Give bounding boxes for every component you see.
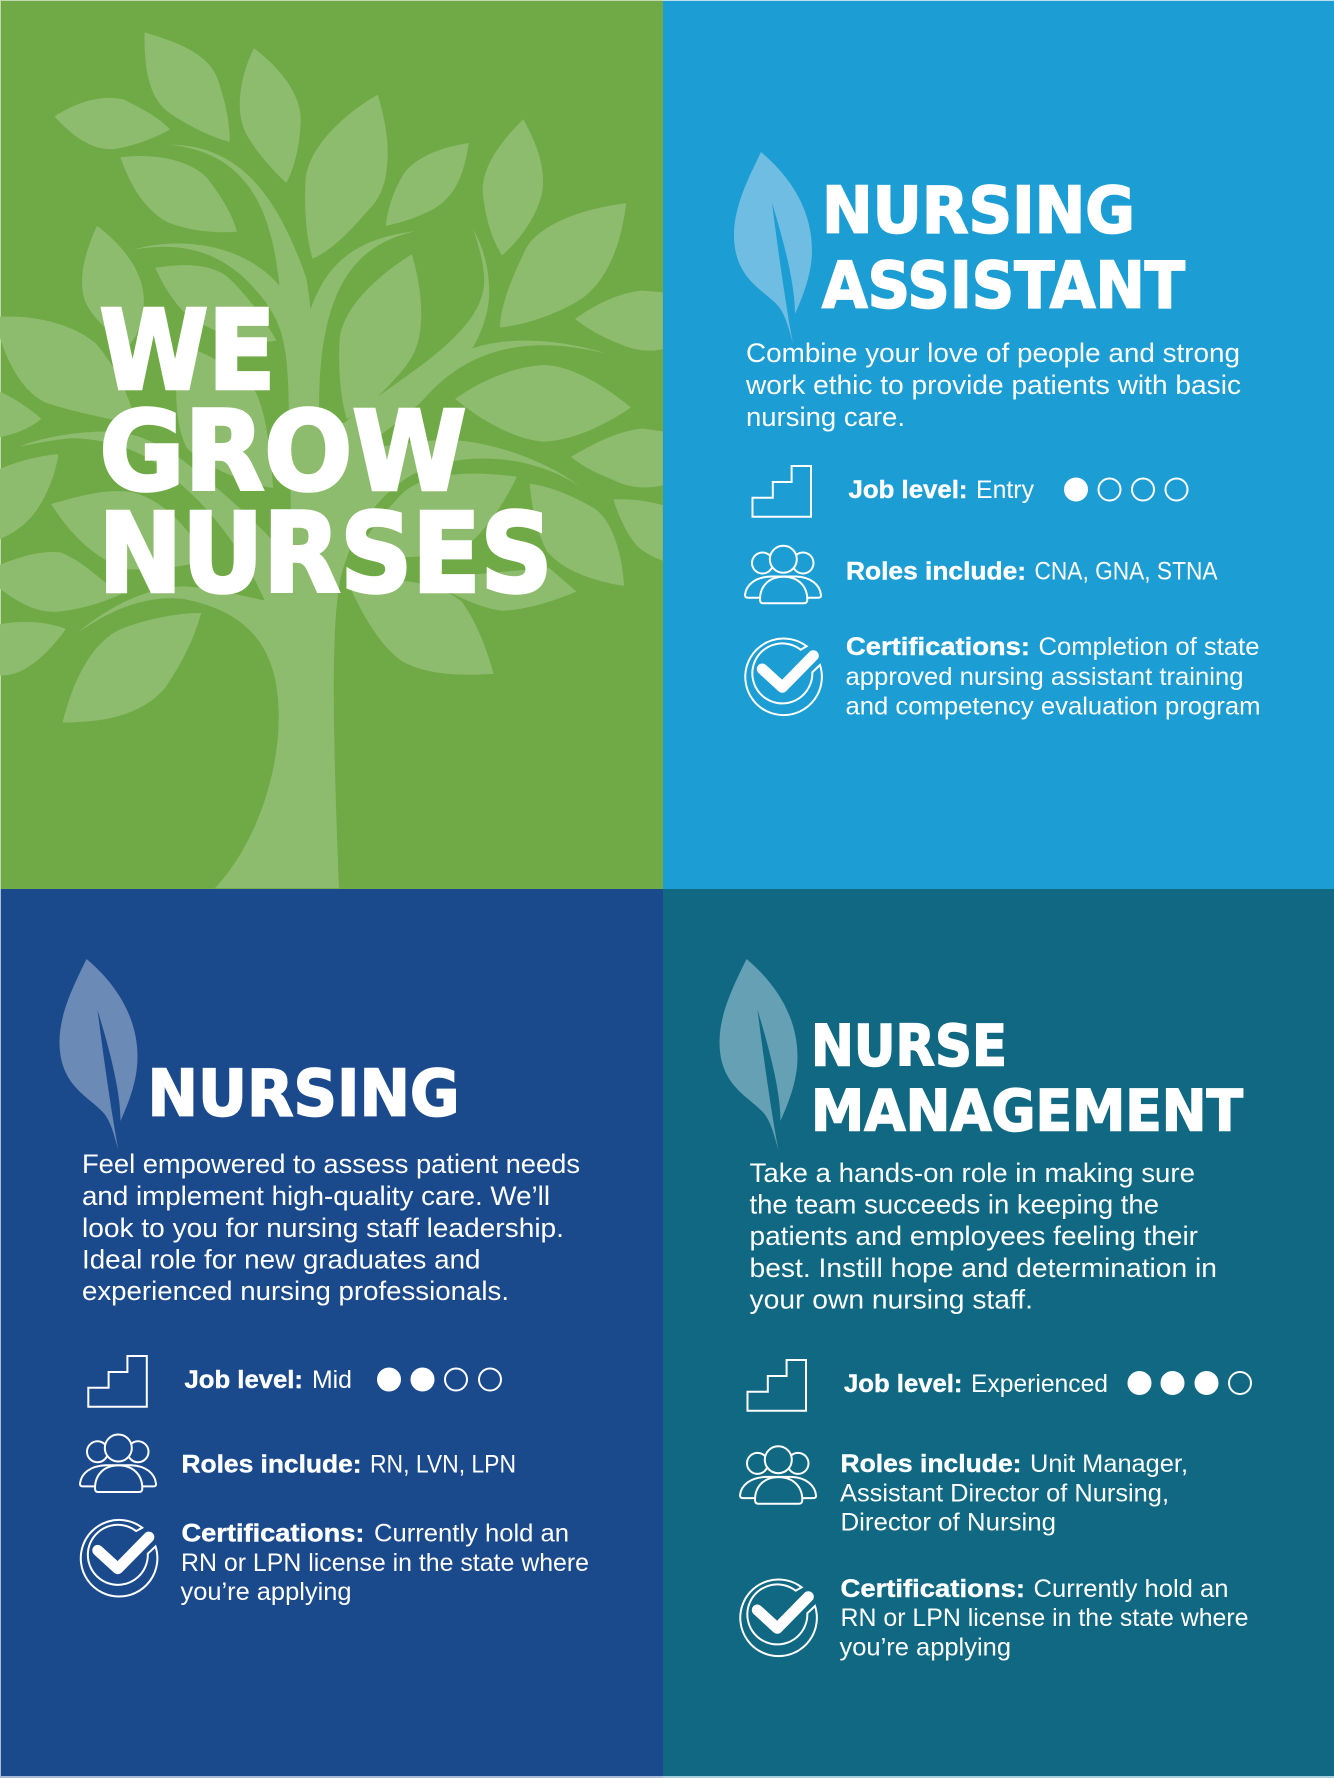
roles: CNA, GNA, STNA [1034,558,1218,586]
job level: Job level: [844,1370,962,1398]
certifications: Certifications: [182,1520,364,1548]
icon: people [740,1446,816,1504]
roles [182,1450,516,1478]
description: your own nursing staff. [750,1284,1033,1314]
icon: certification check [745,639,822,715]
main title [98,286,552,617]
roles [840,1450,1188,1536]
heading: nursing: NURSING [148,1058,460,1132]
job level: Mid [312,1366,352,1394]
job level: Experienced [971,1370,1108,1398]
icon: people [80,1434,156,1492]
icon: people [745,546,821,603]
icon: certification check [81,1520,157,1597]
certifications: you’re applying [840,1634,1011,1662]
main title: NURSES [98,489,552,617]
icon: certification check [740,1580,817,1656]
roles: Roles include: [182,1450,362,1478]
roles [846,558,1218,586]
panel: nursing assistant [663,0,1334,889]
heading: nursing assistant [822,174,1185,324]
description: nursing care. [746,402,905,432]
description: best. Instill hope and determination in [750,1253,1217,1283]
certifications: approved nursing assistant training [846,663,1244,691]
description: work ethic to provide patients with basic [745,370,1241,400]
panel: nursing [0,889,663,1778]
roles: Roles include: [840,1450,1022,1478]
job level: Job level: [848,476,968,504]
heading: nursing assistant: NURSING [822,174,1135,248]
main title: WE [100,286,276,414]
certifications: Completion of state [1038,633,1260,661]
job level: Job level: [184,1366,303,1394]
icon: stairs [88,1356,147,1407]
description: patients and employees feeling their [750,1221,1198,1251]
certifications [180,1520,589,1606]
certifications: Certifications: [840,1575,1025,1603]
heading: nurse management: MANAGEMENT [811,1078,1243,1144]
description [82,1149,580,1306]
job level: Entry [976,476,1034,504]
panel: we grow nurses [0,0,663,889]
icon: leaf [720,959,798,1151]
roles: Director of Nursing [840,1508,1056,1536]
description: Take a hands-on role in making sure [750,1158,1195,1188]
certifications [840,1575,1248,1662]
description: experienced nursing professionals. [82,1276,509,1306]
heading: nursing assistant: ASSISTANT [822,250,1185,324]
description [745,338,1241,432]
certifications: RN or LPN license in the state where [181,1549,589,1577]
heading: nurse management: NURSE [811,1014,1007,1080]
description [750,1158,1217,1314]
certifications: Currently hold an [374,1520,569,1548]
tree illustration [0,32,663,888]
description: Combine your love of people and strong [746,338,1240,368]
job level [844,1370,1108,1398]
description: the team succeeds in keeping the [750,1190,1159,1220]
certifications [846,633,1260,720]
certifications: Currently hold an [1034,1575,1228,1603]
job level dots [1065,478,1188,500]
main title: GROW [100,387,466,515]
certifications: Certifications: [846,633,1030,661]
certifications: RN or LPN license in the state where [840,1604,1248,1632]
certifications: you’re applying [180,1578,352,1606]
roles: Unit Manager, [1030,1450,1188,1478]
description: look to you for nursing staff leadership. [82,1213,564,1243]
icon: leaf [60,959,138,1151]
roles: RN, LVN, LPN [370,1450,516,1478]
description: and implement high-quality care. We’ll [82,1181,550,1211]
certifications: and competency evaluation program [846,692,1260,720]
roles: Assistant Director of Nursing, [840,1480,1169,1508]
job level [848,476,1034,504]
job level dots [1128,1372,1251,1394]
panel: nurse management [663,889,1334,1778]
roles: Roles include: [846,558,1026,586]
job level dots [378,1368,501,1390]
icon: stairs [748,1360,806,1411]
description: Feel empowered to assess patient needs [82,1149,580,1179]
icon: stairs [752,466,811,517]
description: Ideal role for new graduates and [82,1244,480,1274]
icon: leaf [734,152,812,344]
job level [184,1366,352,1394]
heading: nurse management [811,1014,1243,1144]
